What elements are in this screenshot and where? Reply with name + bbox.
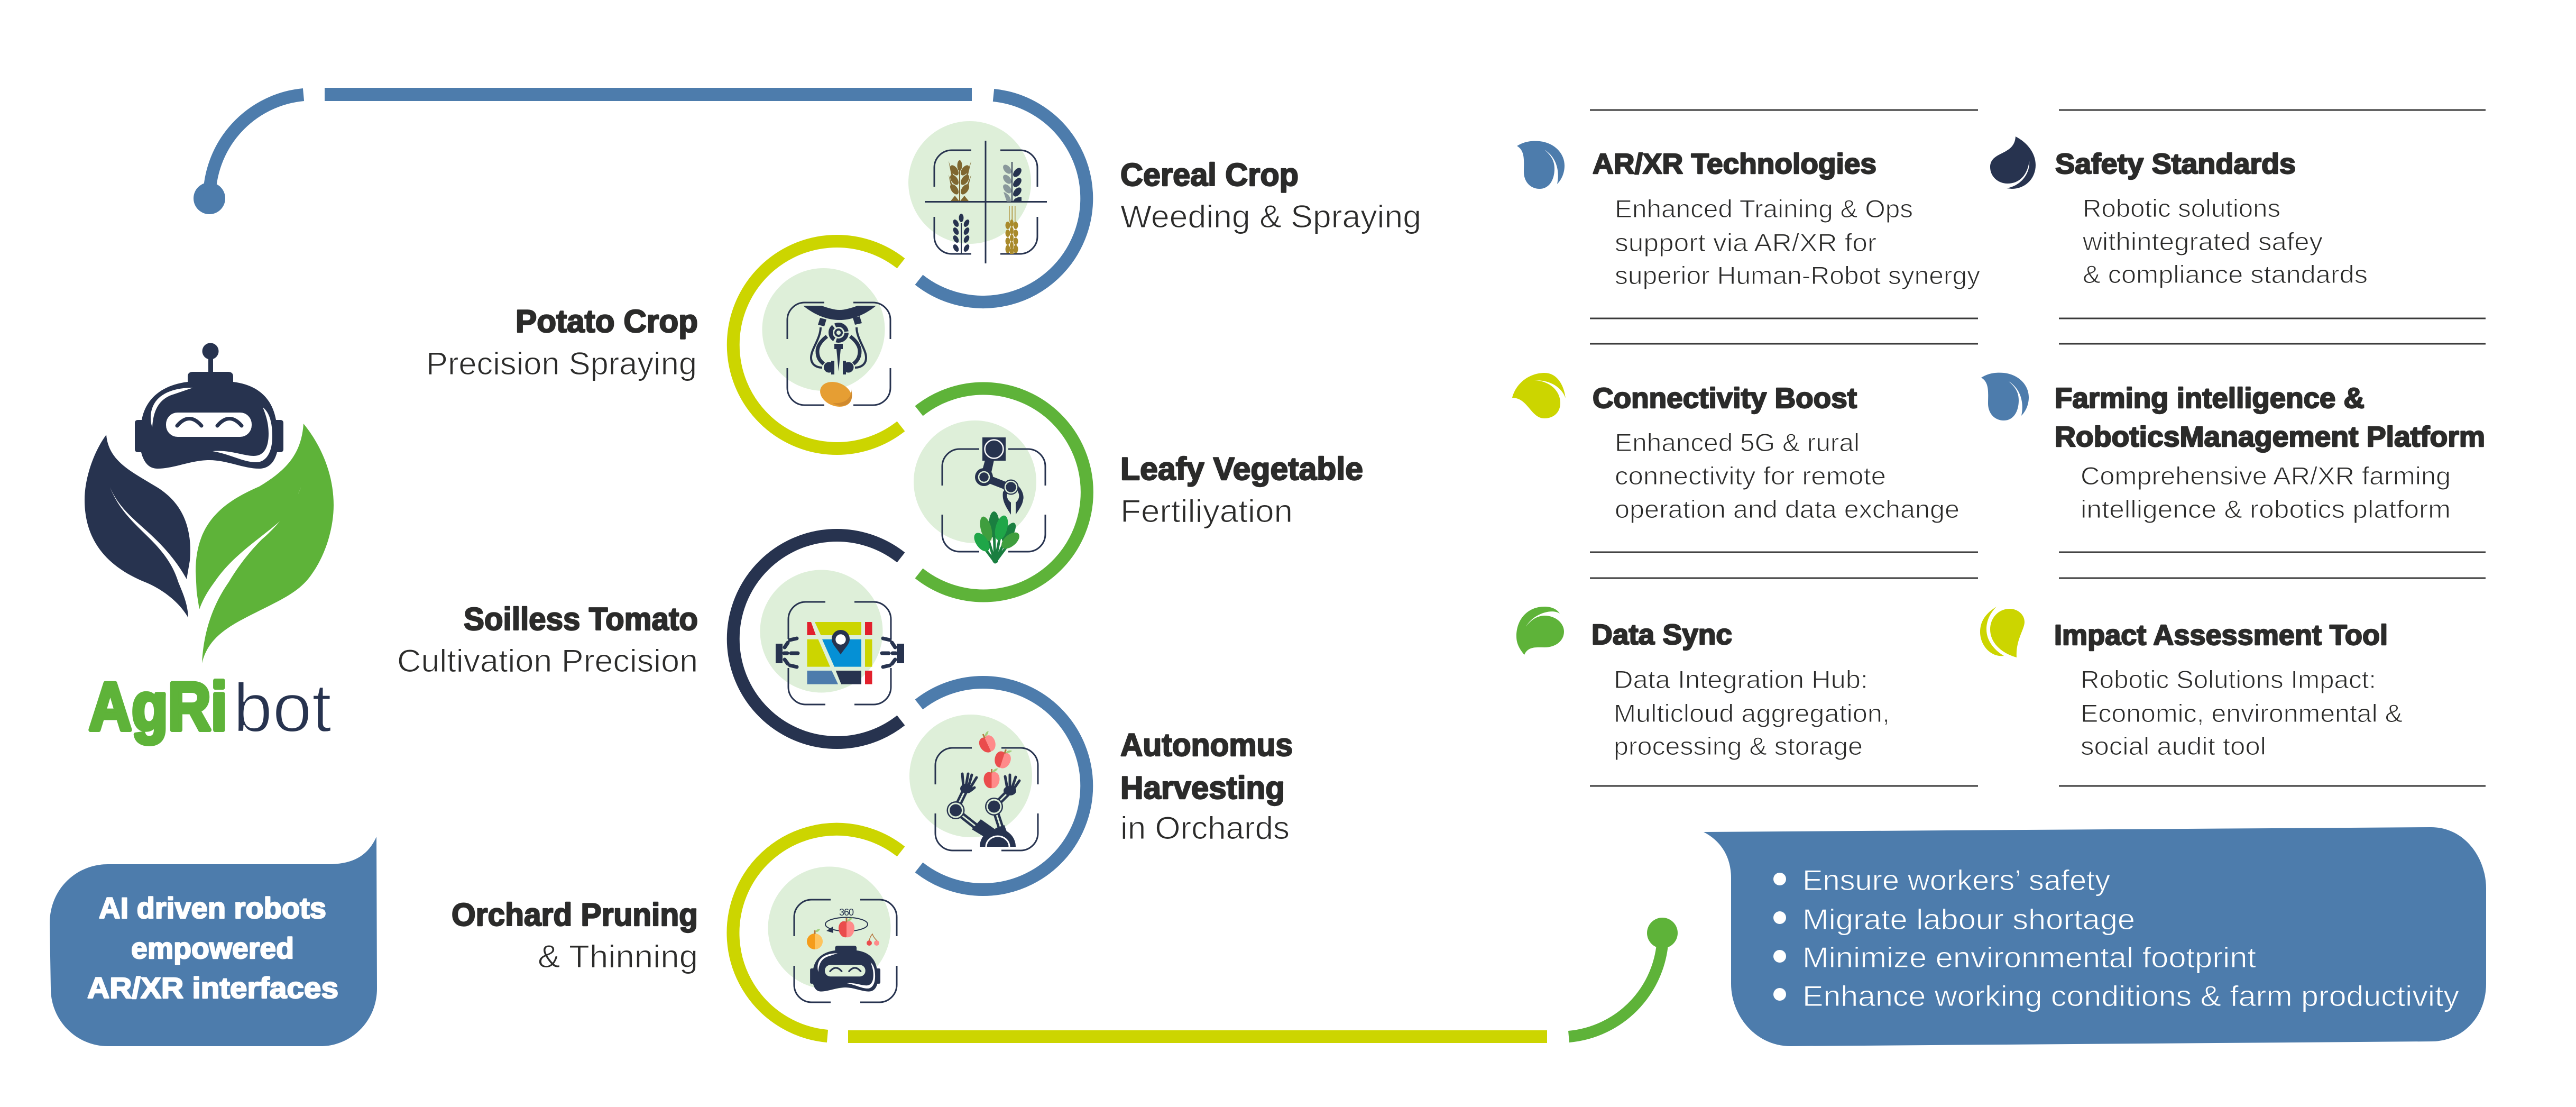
icon: robot hands and apples [935, 730, 1038, 850]
feature: Data Sync [1516, 578, 1978, 786]
icon: yellow leaf [1980, 607, 2025, 657]
icon: blue leaf [1517, 141, 1565, 189]
icon: VR headset and fruit: 360 [839, 907, 854, 918]
feature: Farming intelligence platform [1981, 344, 2486, 552]
feature: Impact Assessment Tool [1980, 578, 2486, 786]
label: cereal crop [1120, 157, 1421, 234]
icon: VR headset and fruit [794, 900, 897, 1002]
label: autonomous harvesting: in Orchards [1120, 810, 1290, 846]
label: orchard pruning: Orchard Pruning [452, 897, 698, 932]
callout: AI driven robots: empowered [131, 931, 294, 965]
feature: Connectivity Boost: connectivity for remote [1615, 462, 1886, 490]
feature: AR/XR Technologies: support via AR/XR for [1615, 228, 1876, 257]
feature: Safety Standards: withintegrated safey [2082, 227, 2323, 255]
icon: navy leaf [1990, 136, 2036, 189]
logo wordmark [89, 669, 332, 746]
label: soilless tomato: Soilless Tomato [464, 601, 698, 637]
label: potato crop: Precision Spraying [426, 346, 697, 381]
feature: Data Sync: processing & storage [1614, 732, 1863, 760]
feature: Farming intelligence platform: RoboticsManagement Platform [2055, 421, 2485, 453]
panel: leafy vegetable [914, 388, 1363, 596]
label: potato crop: Potato Crop [516, 304, 698, 339]
feature: Connectivity Boost [1512, 344, 1978, 552]
connector: yellow bar and green curve [848, 918, 1678, 1043]
callout: AI driven robots [50, 837, 377, 1046]
feature: Data Sync: Data Sync [1591, 619, 1732, 651]
icon: robot arm and spinach [942, 437, 1045, 563]
icon: green leaf [196, 424, 334, 663]
logo: AgRibot [85, 343, 334, 746]
label: autonomous harvesting: Autonomus [1120, 727, 1293, 763]
label: autonomous harvesting [1120, 727, 1293, 846]
panel: soilless tomato [397, 535, 904, 743]
feature: AR/XR Technologies: Enhanced Training & Ops [1615, 195, 1913, 223]
feature: Impact Assessment Tool: Impact Assessment Tool [2054, 619, 2388, 651]
icon: spraying robot and potato [787, 303, 890, 411]
label: cereal crop: Cereal Crop [1120, 157, 1299, 193]
panel: potato crop [426, 241, 901, 449]
feature: AR/XR Technologies: superior Human-Robot synergy [1615, 261, 1981, 289]
feature: Connectivity Boost: Connectivity Boost [1593, 382, 1857, 414]
feature: AR/XR Technologies: AR/XR Technologies [1593, 148, 1876, 180]
connector: start dot and curve [194, 88, 972, 214]
label: potato crop [426, 304, 698, 381]
panel: autonomous harvesting [909, 682, 1293, 890]
label: soilless tomato: Cultivation Precision [397, 643, 698, 679]
feature: Connectivity Boost: Enhanced 5G & rural [1615, 428, 1860, 456]
icon: green leaf [1516, 607, 1564, 655]
feature: AR/XR Technologies [1517, 110, 1981, 318]
feature: Safety Standards: Safety Standards [2055, 148, 2296, 180]
callout: benefits list: Minimize environmental footprint [1802, 941, 2256, 974]
icon: navy leaf [85, 435, 190, 618]
label: orchard pruning [452, 897, 698, 974]
callout: benefits list: Enhance working conditions & farm productivity [1802, 980, 2460, 1012]
feature: Impact Assessment Tool: Robotic Solutions Impact: [2081, 665, 2376, 693]
feature: Impact Assessment Tool: social audit tool [2081, 732, 2266, 760]
label: leafy vegetable: Fertiliyation [1120, 493, 1293, 529]
feature: Data Sync: Multicloud aggregation, [1614, 699, 1890, 727]
label: autonomous harvesting: Harvesting [1120, 770, 1285, 806]
label: orchard pruning: & Thinning [538, 939, 698, 974]
panel: cereal crop [908, 95, 1421, 302]
feature: Data Sync: Data Integration Hub: [1614, 665, 1868, 693]
feature: Connectivity Boost: operation and data exchange [1615, 495, 1959, 523]
logo wordmark: AgRi [89, 669, 227, 745]
feature: Impact Assessment Tool: Economic, environmental & [2081, 699, 2403, 727]
label: soilless tomato [397, 601, 698, 679]
callout: benefits list: Migrate labour shortage [1802, 903, 2135, 936]
feature: Farming intelligence platform: Comprehensive AR/XR farming [2081, 462, 2451, 490]
feature: Safety Standards [1990, 110, 2486, 318]
callout: AI driven robots: AI driven robots [99, 891, 326, 925]
icon: yellow leaf [1512, 373, 1566, 418]
callout: benefits list [1704, 827, 2486, 1046]
icon: cereal varieties [925, 141, 1047, 263]
callout: AI driven robots: AR/XR interfaces [87, 971, 338, 1004]
label: leafy vegetable: Leafy Vegetable [1120, 451, 1363, 487]
icon: blue leaf [1981, 373, 2029, 420]
label: leafy vegetable [1120, 451, 1363, 529]
icon: field map with pin [776, 602, 904, 705]
feature: Safety Standards: Robotic solutions [2083, 194, 2280, 222]
feature: Safety Standards: & compliance standards [2083, 260, 2368, 288]
label: cereal crop: Weeding & Spraying [1120, 199, 1421, 234]
logo wordmark: bot [233, 669, 332, 746]
feature: Farming intelligence platform: Farming intelligence & [2055, 382, 2365, 414]
icon: robot VR head [135, 343, 283, 469]
callout: benefits list: Ensure workers’ safety [1802, 864, 2111, 896]
feature: Farming intelligence platform: intelligence & robotics platform [2081, 495, 2451, 523]
panel: orchard pruning [452, 829, 901, 1036]
